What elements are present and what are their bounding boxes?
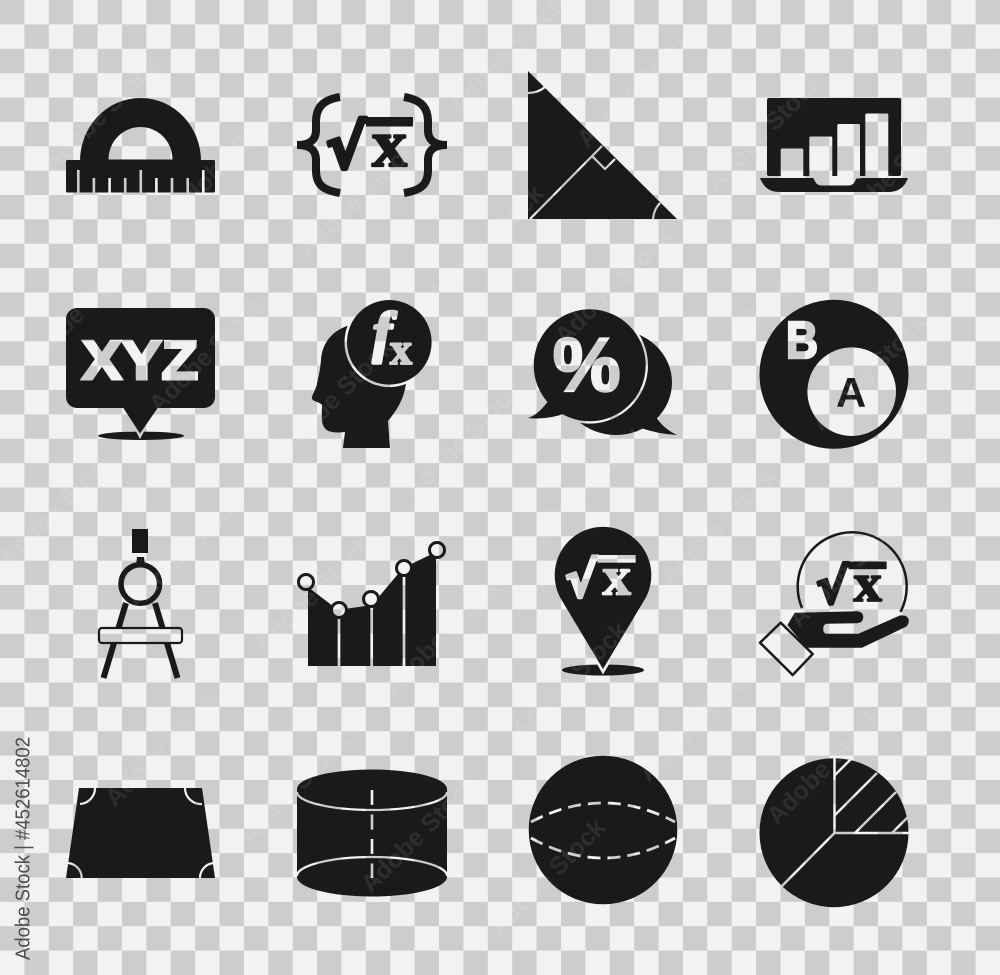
- watermark grid: Adobe Stock: [633, 659, 761, 787]
- icon: head with function symbol: [312, 298, 434, 448]
- watermark grid: Adobe Stock: [377, 573, 505, 701]
- icon: circle B with circle A: A: [836, 369, 866, 416]
- watermark grid: Adobe Stock: [805, 308, 933, 436]
- icon: percent chat bubbles: [528, 307, 677, 435]
- icon: laptop with bar chart: [760, 98, 908, 192]
- icon: hand holding square root: [760, 532, 908, 675]
- icon: line and area chart: [298, 542, 444, 667]
- icon: protractor: [66, 98, 215, 193]
- icon: head with function symbol: x: [390, 325, 412, 374]
- icon: trapezoid with angle marks: [66, 788, 215, 878]
- watermark grid: Adobe Stock: [677, 265, 805, 393]
- icon: map pin with square root: √: [565, 552, 598, 608]
- icon: percent chat bubbles: %: [553, 323, 620, 408]
- icon: right triangle with altitude: [528, 71, 677, 219]
- icon: drawing compass: [99, 529, 182, 678]
- watermark grid: Adobe Stock: [655, 462, 783, 590]
- watermark grid: Adobe Stock: [99, 684, 227, 812]
- icon: hand holding square root: √: [816, 559, 849, 615]
- watermark grid: Adobe Stock: [761, 702, 889, 830]
- icon: XYZ speech pointer: XYZ: [82, 329, 198, 391]
- watermark grid: Adobe Stock: [783, 505, 911, 633]
- icon: square root in braces: [297, 97, 447, 193]
- icon: cylinder: [297, 770, 447, 897]
- icon: hand holding square root: x: [853, 553, 882, 613]
- icon: circle B with circle A: B: [786, 312, 818, 370]
- icon: head with function symbol: f: [373, 302, 397, 364]
- icon: pie chart with hatched slice: [760, 757, 910, 907]
- watermark grid: Adobe Stock: [37, 50, 165, 178]
- watermark grid: Adobe Stock: [249, 530, 377, 658]
- watermark grid: Adobe Stock: [355, 770, 483, 898]
- watermark grid: Adobe Stock: [699, 68, 827, 196]
- watermark grid: Adobe Stock: [165, 93, 293, 221]
- watermark grid: Adobe Stock: [571, 25, 699, 153]
- watermark grid: Adobe Stock: [399, 376, 527, 504]
- icon: square root in braces: x: [372, 107, 408, 181]
- watermark grid: Adobe Stock: [421, 179, 549, 307]
- watermark grid: Adobe Stock: [293, 136, 421, 264]
- icon: XYZ speech pointer: [66, 308, 215, 440]
- icon: circle B with circle A: [760, 300, 908, 449]
- watermark grid: Adobe Stock: [121, 487, 249, 615]
- icon: map pin with square root: x: [602, 547, 631, 607]
- watermark grid: Adobe Stock: [827, 111, 955, 239]
- icon: map pin with square root: [555, 527, 651, 676]
- icon: sphere with dashed equator: [529, 756, 677, 904]
- watermark grid: Adobe Stock: [271, 333, 399, 461]
- watermark grid: Adobe Stock: [505, 616, 633, 744]
- stock image credit: Adobe Stock | #452614802: [12, 737, 34, 960]
- watermark grid: Adobe Stock: [227, 727, 355, 855]
- watermark grid: Adobe Stock: [483, 813, 611, 941]
- watermark grid: Adobe Stock: [549, 222, 677, 350]
- watermark grid: Adobe Stock: [15, 247, 143, 375]
- watermark grid: Adobe Stock: [143, 290, 271, 418]
- icon: square root in braces: √: [326, 113, 367, 183]
- watermark grid: Adobe Stock: [527, 419, 655, 547]
